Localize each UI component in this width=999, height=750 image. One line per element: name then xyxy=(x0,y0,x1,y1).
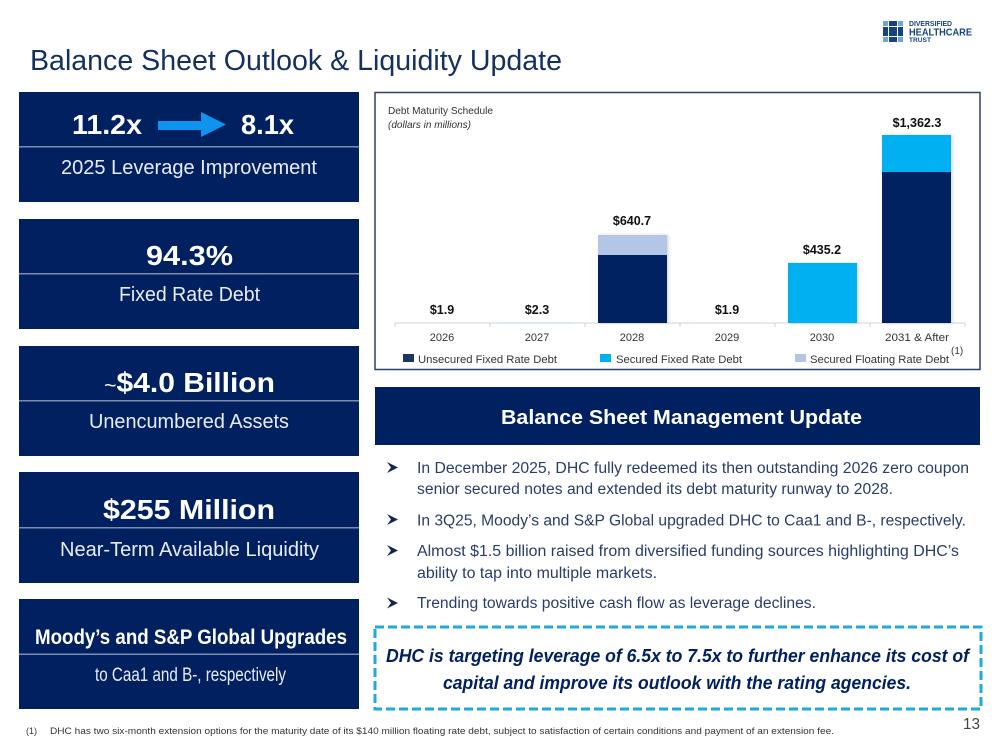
bullet: funding: Almost $1.5 billion raised from diversified funding sources highlighting DHC’s xyxy=(417,543,959,560)
bullet: funding: ability to tap into multiple markets. xyxy=(417,565,657,582)
value labels: $1.9 xyxy=(715,303,739,317)
panel: fixed rate debt: Fixed Rate Debt xyxy=(119,284,260,306)
year labels: 2029 xyxy=(715,332,739,344)
footnote: DHC has two six-month extension options for the maturity date of its $140 million floating rate debt, subject to satisfaction of certain conditions and payment of an extension fee. xyxy=(50,726,834,736)
footnote: (1) xyxy=(26,726,37,736)
chart legend: Secured Fixed Rate Debt xyxy=(616,354,742,366)
bullet list xyxy=(387,460,969,612)
value labels: $1,362.3 xyxy=(893,116,941,130)
panel: unencumbered assets: Unencumbered Assets xyxy=(89,411,289,433)
logo: Diversified Healthcare Trust: TRUST xyxy=(909,37,931,44)
panel: debt maturity chart xyxy=(375,92,980,370)
bullet: cash flow: Trending towards positive cash flow as leverage declines. xyxy=(417,595,816,612)
chart legend: (1) xyxy=(951,346,963,357)
leverage start value: 11.2x xyxy=(72,109,142,140)
chart legend: Secured Floating Rate Debt xyxy=(810,354,949,366)
bullet: redemption: In December 2025, DHC fully redeemed its then outstanding 2026 zero coupon xyxy=(417,460,969,477)
panel: rating upgrades: Moody’s and S&P Global Upgrades xyxy=(35,626,347,649)
panel: rating upgrades: to Caa1 and B-, respectively xyxy=(95,665,286,686)
bullet: redemption xyxy=(387,460,969,498)
year labels xyxy=(430,332,949,344)
chart title xyxy=(388,106,493,131)
panel: fixed rate debt xyxy=(19,219,359,329)
chart legend: Unsecured Fixed Rate Debt xyxy=(418,354,557,366)
value labels: $2.3 xyxy=(525,303,549,317)
year labels: 2030 xyxy=(810,332,834,344)
chart legend xyxy=(403,346,963,366)
bar chart xyxy=(395,116,965,344)
chart title: Debt Maturity Schedule xyxy=(388,106,493,117)
leverage end value: 8.1x xyxy=(241,109,294,140)
chart title: (dollars in millions) xyxy=(388,120,471,131)
arrow: leverage decline xyxy=(158,112,226,137)
callout: leverage target: DHC is targeting leverage of 6.5x to 7.5x to further enhance its cost of xyxy=(386,646,971,666)
year labels: 2027 xyxy=(525,332,549,344)
panel: available liquidity: $255 Million xyxy=(103,494,275,525)
heading: balance sheet management update: Balance Sheet Management Update xyxy=(501,407,862,429)
panel: available liquidity: Near-Term Available Liquidity xyxy=(60,539,319,561)
panel: leverage improvement xyxy=(19,92,359,202)
title: Balance Sheet Outlook & Liquidity Update xyxy=(30,45,562,77)
heading: balance sheet management update xyxy=(375,387,980,445)
bullet: upgrades: In 3Q25, Moody’s and S&P Global upgraded DHC to Caa1 and B-, respectively. xyxy=(417,512,966,530)
logo: Diversified Healthcare Trust: DIVERSIFIED xyxy=(909,21,952,28)
page number: 13 xyxy=(963,716,980,733)
panel: available liquidity xyxy=(19,472,359,583)
value labels: $1.9 xyxy=(430,303,454,317)
value labels: $435.2 xyxy=(803,243,841,257)
leverage caption: 2025 Leverage Improvement xyxy=(61,157,317,179)
panel: unencumbered assets xyxy=(19,346,359,456)
callout: leverage target: capital and improve its outlook with the rating agencies. xyxy=(443,673,911,693)
year labels: 2031 & After xyxy=(885,332,949,344)
panel: unencumbered assets: ~$4.0 Billion xyxy=(104,367,275,398)
bullet: redemption: senior secured notes and extended its debt maturity runway to 2028. xyxy=(417,481,893,498)
value labels: $640.7 xyxy=(613,214,651,228)
panel: rating upgrades xyxy=(19,599,359,709)
callout: leverage target xyxy=(375,627,981,709)
logo: Diversified Healthcare Trust: HEALTHCARE xyxy=(909,26,972,38)
year labels: 2028 xyxy=(620,332,644,344)
bullet: funding xyxy=(387,543,959,582)
logo: Diversified Healthcare Trust xyxy=(883,21,972,44)
panel: fixed rate debt: 94.3% xyxy=(146,240,233,271)
value labels xyxy=(430,116,941,317)
year labels: 2026 xyxy=(430,332,454,344)
